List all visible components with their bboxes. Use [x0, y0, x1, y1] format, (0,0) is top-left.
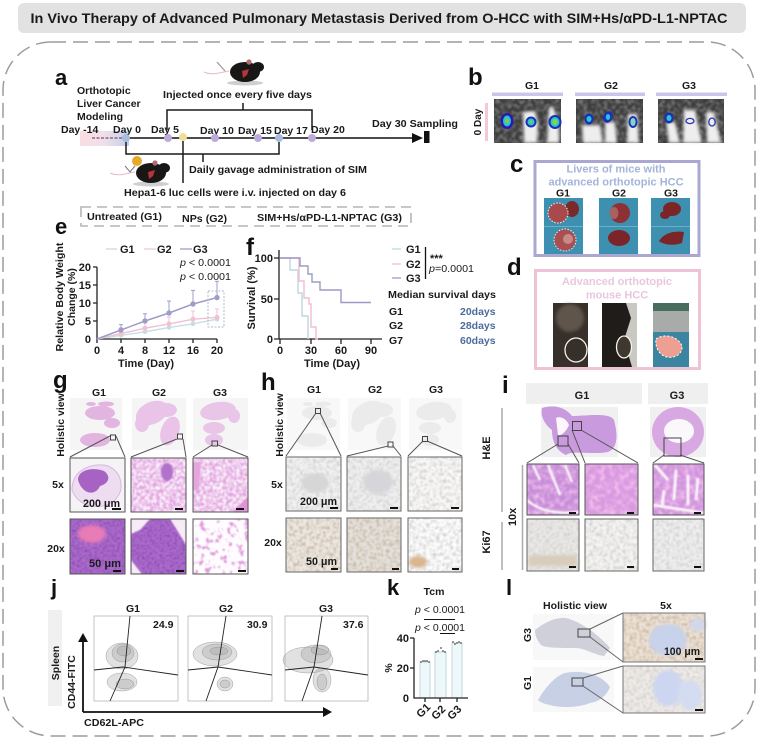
zoom guides l [583, 613, 623, 713]
plot G3 [283, 603, 368, 701]
scale bars l [695, 658, 703, 711]
scale labels g: 50 μm [89, 558, 121, 570]
headings l [543, 600, 672, 612]
series G3 [97, 281, 219, 339]
axes e [93, 267, 217, 343]
median survival table: G2 [389, 320, 403, 332]
20x images h [286, 518, 462, 572]
panel letter k: k [387, 575, 400, 600]
scale labels g: 200 μm [83, 498, 120, 510]
y axis title e: Change (%) [66, 268, 78, 326]
panel letter i: i [502, 372, 509, 399]
data points k [420, 641, 462, 663]
day labels: Day 17 [274, 125, 308, 137]
tick labels k [397, 633, 464, 722]
group legend box [81, 207, 411, 226]
title banner [18, 3, 746, 33]
tissue label [48, 610, 62, 706]
column labels g: G2 [152, 387, 166, 399]
group labels [525, 80, 696, 92]
tick labels k: G2 [429, 703, 448, 722]
p values k: p < 0.0001 [414, 622, 465, 634]
tick labels k: 20 [397, 663, 409, 675]
y axis title f: Survival (%) [246, 266, 258, 329]
median survival table: Median survival days [388, 289, 496, 301]
legend f: G2 [406, 259, 421, 271]
panel h: Ki67 lung sections [261, 369, 462, 572]
median survival table: 60days [460, 335, 496, 347]
group bars [492, 92, 727, 96]
heading d: Advanced orthotopic [562, 276, 672, 288]
p values e: p < 0.0001 [179, 257, 231, 269]
holistic G1 [533, 667, 614, 712]
column labels h: G2 [368, 384, 382, 396]
axes f [274, 250, 382, 344]
labels c: G2 [612, 188, 626, 200]
day labels: Day 15 [238, 125, 272, 137]
zoom guides g [70, 436, 248, 457]
tick labels f: 30 [305, 345, 317, 357]
mouse icon: injection [204, 59, 264, 86]
column labels g: G1 [92, 387, 106, 399]
day labels: Day -14 [61, 124, 99, 136]
tick labels e: 5 [85, 316, 91, 328]
column labels h: G1 [307, 384, 321, 396]
axis titles [66, 655, 144, 729]
legend f: G3 [406, 273, 421, 285]
tick labels f: 100 [255, 253, 273, 265]
group labels: G2 [604, 80, 618, 92]
median survival table: G7 [389, 335, 403, 347]
headings l: Holistic view [543, 600, 608, 612]
thumbnails h [287, 396, 462, 450]
tick labels f: 90 [365, 345, 377, 357]
modeling label: Modeling [77, 111, 123, 123]
day labels [61, 118, 458, 137]
panel letter c: c [510, 151, 523, 178]
plot G1 [94, 603, 178, 701]
day 6 stem [182, 141, 184, 183]
stain labels i [481, 436, 519, 554]
tick labels k: 0 [403, 693, 409, 705]
axes k [410, 638, 468, 702]
tissue label: Spleen [50, 646, 62, 680]
column headers i: G1 [575, 390, 589, 402]
5x image G1 l [623, 666, 705, 713]
gavage bracket [126, 142, 279, 162]
H&E row i [527, 464, 704, 515]
median survival table [388, 289, 496, 347]
day labels: Day 5 [151, 124, 179, 136]
panel letter a: a [55, 65, 68, 90]
photo: mouse side [602, 303, 637, 367]
scale label l: 100 μm [664, 646, 700, 658]
zoom guides i [527, 430, 704, 463]
arrowheads [78, 633, 332, 717]
frame c [535, 162, 699, 256]
scale bars g [112, 508, 246, 572]
column labels h: G3 [429, 384, 443, 396]
tick labels f: 0 [267, 334, 273, 346]
y axis title e: Relative Body Weight [54, 242, 66, 352]
tick labels f [255, 253, 377, 357]
column labels g [92, 387, 227, 399]
median survival table: 28days [460, 320, 496, 332]
panel letter f: f [246, 234, 255, 261]
median survival table: G1 [389, 306, 403, 318]
heading c [548, 164, 684, 188]
row labels h [264, 392, 286, 549]
panel letter e: e [55, 214, 67, 239]
tick labels e: 20 [79, 262, 91, 274]
column headers i [526, 383, 708, 404]
holistic G3 [533, 614, 614, 660]
stain labels i: 10x [507, 507, 519, 526]
legend f [392, 244, 421, 285]
axes arrows [83, 640, 325, 712]
plot G3: G3 [319, 603, 333, 615]
panel e: body weight chart [54, 214, 231, 370]
y axis title e [54, 242, 78, 352]
20x image G1 [70, 519, 125, 574]
p values k [414, 604, 465, 634]
selection squares g [110, 434, 218, 446]
selection squares i [558, 422, 681, 456]
liver photos G1 [544, 198, 583, 254]
20x image G3 [193, 519, 248, 574]
tick labels f: 50 [261, 294, 273, 306]
curve G3 [280, 258, 371, 302]
liver photos G3 [651, 198, 690, 254]
group legend box: Untreated (G1) [87, 211, 162, 223]
liver photos G2 [599, 198, 638, 254]
p values e [179, 257, 231, 283]
heading d: mouse HCC [586, 290, 648, 302]
series G1 [97, 317, 219, 339]
tick labels k: 40 [397, 633, 409, 645]
row labels g [47, 392, 67, 555]
labels c: G3 [664, 188, 678, 200]
scale labels h: 50 μm [306, 556, 337, 568]
panel letter l: l [506, 575, 512, 600]
axis titles: CD44-FITC [66, 655, 78, 709]
day labels: Day 10 [200, 125, 234, 137]
injection bracket [167, 103, 312, 130]
panel c: liver photos [510, 151, 699, 256]
tick labels e: 0 [85, 334, 91, 346]
tick labels e: 4 [118, 345, 125, 357]
stain labels i: H&E [481, 436, 493, 460]
column headers i: G3 [670, 390, 684, 402]
scale labels h: 200 μm [300, 496, 337, 508]
panel i: intestine liver sections [481, 372, 708, 571]
plot G2 [188, 603, 272, 701]
x axis title e: Time (Day) [118, 358, 174, 370]
tick labels k: G3 [445, 703, 464, 722]
bars k [420, 643, 462, 698]
tick labels f: 60 [335, 345, 347, 357]
series G2 [97, 309, 219, 339]
group legend box: SIM+Hs/αPD-L1-NPTAC (G3) [257, 212, 402, 224]
tick labels e [79, 262, 223, 357]
legend e: G3 [193, 244, 208, 256]
highlight box e [208, 291, 224, 327]
timeline axis with arrow [92, 131, 430, 143]
modeling label: Orthotopic [77, 85, 131, 97]
panel letter b: b [468, 64, 483, 91]
row labels h: 5x [271, 479, 283, 491]
modeling gradient band [80, 131, 129, 146]
5x image G2 [131, 458, 186, 512]
mouse icon: gavage [110, 156, 170, 186]
thumbnails g [70, 396, 248, 450]
significance: p=0.0001 [428, 263, 474, 275]
plot G1: G1 [126, 603, 140, 615]
curve G2 [280, 258, 318, 339]
p values k: p < 0.0001 [414, 604, 465, 616]
imaging G3 [658, 99, 724, 143]
tick labels e: 8 [142, 345, 148, 357]
y axis title k: % [383, 663, 395, 673]
day labels: Day 20 [311, 124, 345, 136]
title banner: In Vivo Therapy of Advanced Pulmonary Metastasis Derived from O-HCC with SIM+Hs/αPD-L1-NPTAC [30, 11, 728, 26]
legend e [106, 244, 208, 256]
photo: mouse abdomen [553, 303, 588, 367]
median survival table: 20days [460, 306, 496, 318]
gavage caption: Daily gavage administration of SIM [189, 164, 367, 176]
heading c: advanced orthotopic HCC [548, 176, 684, 188]
heading d [562, 276, 672, 302]
5x image G1 with tumor [70, 458, 125, 512]
tick labels e: 0 [94, 345, 100, 357]
modeling label [77, 85, 141, 123]
row labels g: 20x [47, 543, 65, 555]
thumbnail G1 i [541, 406, 618, 457]
row labels l [522, 628, 534, 690]
heading k: Tcm [424, 586, 444, 598]
tick labels e: 10 [79, 298, 91, 310]
panel letter d: d [507, 254, 522, 281]
panel l: spleen sections [506, 575, 706, 713]
plot G2: G2 [219, 603, 233, 615]
Ki67 row i [527, 519, 704, 571]
panel b: bioluminescence images [468, 64, 727, 143]
row labels h: Holistic view [274, 392, 286, 457]
day labels: Day 0 [113, 124, 141, 136]
group labels: G3 [682, 80, 696, 92]
photo: excised liver [653, 303, 689, 367]
row labels g: 5x [52, 479, 64, 491]
legend e: G1 [120, 244, 135, 256]
row labels h: 20x [264, 537, 282, 549]
tick labels e: 15 [79, 280, 91, 292]
column labels g: G3 [213, 387, 227, 399]
modeling label: Liver Cancer [77, 98, 141, 110]
timeline dots [122, 133, 316, 142]
group labels: G1 [525, 80, 539, 92]
selection squares l [572, 629, 590, 686]
plot G3: 37.6 [343, 619, 364, 631]
20x image G2 [131, 519, 186, 574]
p values e: p < 0.0001 [179, 271, 231, 283]
plot G2: 30.9 [247, 619, 268, 631]
scale labels h [300, 496, 337, 568]
headings l: 5x [660, 600, 672, 612]
5x image G3 [193, 458, 248, 512]
5x image G3 l [623, 613, 706, 662]
tick labels k: G1 [414, 701, 433, 720]
significance [426, 247, 474, 279]
tick labels f: 0 [277, 345, 283, 357]
stain labels i: Ki67 [481, 530, 493, 554]
panel j: flow cytometry [48, 575, 368, 729]
5x images h [286, 457, 462, 511]
legend f: G1 [406, 244, 421, 256]
panel letter h: h [261, 369, 276, 396]
imaging G2 [576, 99, 643, 143]
panel letter g: g [53, 367, 68, 394]
scale bars h [330, 507, 459, 570]
row labels l: G1 [522, 676, 534, 690]
day label with pink bar: 0 Day [473, 108, 484, 135]
row labels g: Holistic view [55, 392, 67, 457]
panel letter j: j [50, 575, 57, 600]
imaging G1 [494, 99, 562, 143]
zoom guides h [286, 413, 462, 456]
heading c: Livers of mice with [566, 164, 666, 176]
tick labels e: 20 [211, 345, 223, 357]
day labels: Day 30 Sampling [372, 118, 458, 130]
panel d: mouse photos [507, 254, 700, 368]
scale bars i [569, 512, 701, 568]
tick labels e: 16 [187, 345, 199, 357]
panel k: Tcm bar chart [383, 575, 468, 722]
panel f: survival chart [246, 234, 496, 370]
axis titles: CD62L-APC [84, 717, 144, 729]
x axis title f: Time (Day) [304, 358, 360, 370]
plot G1: 24.9 [153, 619, 174, 631]
panel a: treatment timeline [55, 59, 458, 226]
day label with pink bar [473, 103, 488, 141]
cell injection caption: Hepa1-6 luc cells were i.v. injected on day 6 [124, 187, 346, 199]
panel g: H&E lung sections [47, 367, 248, 574]
injection caption: Injected once every five days [163, 89, 312, 101]
tick labels e: 12 [163, 345, 175, 357]
significance: *** [430, 253, 444, 265]
thumbnail G3 i [650, 407, 706, 457]
column labels h [307, 384, 443, 396]
scale labels g [83, 498, 121, 570]
frame d [536, 270, 700, 368]
labels c: G1 [556, 188, 570, 200]
stain dividers i [502, 408, 522, 570]
selection squares h [316, 408, 428, 447]
labels c [556, 188, 678, 200]
row labels l: G3 [522, 628, 534, 642]
curve G1 [280, 258, 308, 339]
group legend box: NPs (G2) [182, 213, 227, 225]
legend e: G2 [157, 244, 172, 256]
